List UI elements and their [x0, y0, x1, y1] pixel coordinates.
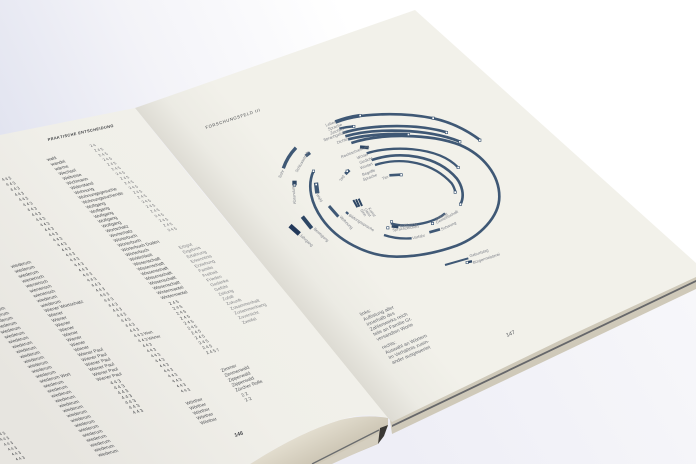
chart labels: Sprachgefühl — [323, 130, 347, 142]
list column: numbers, top: 2 4 5 — [153, 212, 166, 218]
chart labels: Bürgermeisterei — [472, 251, 500, 265]
short bars cluster — [353, 199, 362, 207]
list column: Zimmer entries: Zimmer — [220, 363, 239, 374]
chart labels: Tier — [381, 174, 390, 181]
list column: numbers, lower centre: 2 4 5 — [197, 339, 210, 345]
list column: names, lower left: wiederum — [36, 294, 59, 304]
list column: numbers, far left: 4 4 3 — [30, 211, 43, 217]
list column: numbers, bottom corner: 4 4 3 — [10, 450, 23, 456]
right page heading: FORSCHUNGSFELD III — [205, 107, 261, 130]
list column: numbers, far left: 4 4 3 — [149, 352, 162, 358]
list column: names, lower left: 4 4 3 — [113, 384, 127, 391]
list column: names, bottom left: wiederum — [77, 424, 101, 434]
left page heading: PRAKTISCHE ENTSCHEIDUNG — [47, 123, 114, 142]
list column: numbers, far left: 4 4 3 — [120, 317, 132, 323]
list column: names, upper right: Familie — [197, 265, 215, 273]
list column: names, centre: Weltreise — [61, 172, 83, 181]
list column: names, bottom left: wiederum — [93, 444, 116, 453]
list column: names, lower left: 4 4 3 — [131, 408, 145, 416]
chart labels: Wörter — [356, 151, 370, 160]
list column: Wörther entries: Wörther — [185, 397, 205, 407]
list column: names, bottom left: wiederum — [11, 340, 34, 350]
list column: numbers, far left: 4 4 3 — [17, 196, 30, 202]
list column: names, upper right: Freiheit — [201, 270, 220, 278]
chart labels: Erklärung — [399, 221, 417, 228]
list column: numbers, top: 2 4 5 — [162, 222, 174, 227]
list column: names, bottom left: wiederum — [22, 355, 46, 365]
list column: names, bottom left: wiederum — [19, 350, 42, 360]
list column: numbers, top: 2 4 5 — [144, 203, 157, 209]
list column: names, lower left: wiederum — [13, 265, 37, 275]
list column: names, centre: Wolfgang — [100, 220, 123, 229]
list column: names, centre: Wintermantel — [155, 285, 185, 295]
inner arcs upper right — [367, 149, 463, 204]
list column: numbers, top: 2 4 5 — [110, 165, 123, 171]
chart labels: Sprachzeichen — [392, 224, 419, 232]
chart labels: Schwung — [440, 220, 457, 232]
list column: numbers, far left: 4 4 3 — [51, 236, 64, 242]
chart labels: Bewegung — [313, 226, 330, 243]
list column: names, upper right: Ergebnis — [181, 245, 202, 254]
list column: numbers, far left: 4 4 3 — [175, 382, 188, 388]
list column: numbers, far left: 4 4 3 — [124, 322, 137, 328]
page number 146: 146 — [234, 430, 244, 439]
list column: names, lower left: Wiener Paul — [88, 362, 116, 373]
list column: names, centre: Wortschatz — [108, 229, 134, 238]
list column: numbers, top: 2 4 5 — [166, 226, 179, 232]
list column: names, lower left: Wiener Wortschatz — [43, 299, 86, 314]
list column: Wörther entries: Wörther — [195, 412, 216, 421]
chart labels: Kunst — [367, 206, 378, 218]
list column: numbers, far left: 4 4 3 — [107, 302, 120, 308]
right page caption: teile an Familie Gr. — [372, 316, 414, 338]
right page caption: rechts: — [381, 340, 398, 351]
list column: names, lower left: 4 4 3 — [120, 393, 134, 401]
list column: numbers, lower centre: 2 4 5 — [175, 309, 188, 316]
list column: numbers, far left: 4 4 3 — [13, 191, 26, 197]
list column: names, lower left: wienerisch — [21, 274, 46, 284]
chart labels: Geist — [363, 207, 373, 218]
list column: names, lower left: Wiener — [65, 335, 84, 343]
list column: Zimmer entries: Zürcher Rolle — [234, 379, 265, 393]
list column: numbers, far left: 4 4 3 — [43, 226, 56, 232]
list column: names, bottom left: wiederum — [42, 380, 66, 389]
list column: numbers, far left: 4 4 3 — [115, 312, 128, 318]
list column: Wörther entries: Wörther — [192, 407, 212, 416]
list column: numbers, far left: 4 4 3 — [90, 281, 103, 288]
list column: names, centre: Wissenschaft — [148, 275, 178, 286]
list column: names, lower left: Wiener Paul — [84, 357, 112, 368]
list column: numbers, far left: 4 4 3 — [47, 231, 60, 237]
list column: numbers, far left: 4 4 3 — [158, 362, 171, 368]
right page caption: Auswahl an Wörtern — [384, 333, 429, 356]
list column: numbers, far left: 4 4 3 — [179, 387, 192, 393]
list column: names, lower left: wiederum — [10, 260, 33, 270]
right page caption: im Verhältnis zuein- — [387, 339, 431, 361]
list column: numbers, top: 2 4 5 — [93, 147, 105, 152]
list column: numbers, far left: 4 4 3 — [145, 347, 158, 353]
page number 147: 147 — [505, 330, 516, 339]
list column: names, centre: Wirklichkeit — [128, 252, 154, 262]
list column: names, lower left: 4 4 3 — [109, 379, 123, 386]
list column: names, centre: Wechsel — [57, 168, 77, 176]
list column: names, upper right: Frieden — [205, 274, 224, 283]
list column: numbers, far left: 4 4 3 — [9, 186, 22, 192]
list column: names, centre: Wolfgang — [93, 210, 115, 219]
list column: names, centre: wandel — [49, 159, 67, 167]
list column: numbers, far left: 4 4 3 — [68, 256, 81, 262]
list column: numbers, far left: 4 4 3 — [39, 221, 51, 227]
list column: numbers, far left: 4 4 3 — [22, 201, 34, 207]
list column: names, lower left: Wiener — [58, 325, 76, 334]
list column: numbers, far left: 4 4 3 — [34, 216, 47, 222]
list column: names, lower left: Wiener — [69, 340, 88, 348]
list column: names, lower left: Wiener Paul — [80, 352, 109, 363]
list column: numbers, far left: 4 4 3 — [171, 377, 183, 383]
list column: numbers, lower centre: 2 4 5 — [194, 334, 206, 340]
list column: names, bottom left: wiederum — [89, 439, 112, 448]
list column: numbers, top: 2 4 5 — [118, 175, 131, 181]
list column: numbers, top: 2 4 5 — [136, 194, 149, 199]
chart labels: Tag — [338, 174, 345, 182]
list column: numbers, lower centre: 2 4 5 — [201, 343, 214, 350]
chart labels: Dichter — [336, 136, 350, 145]
chart labels: Rechtschreibung — [340, 143, 370, 159]
list column: names, upper right: Zeitung — [217, 288, 235, 297]
list column: numbers, bottom corner: 4 4 3 — [2, 440, 15, 447]
list column: names, lower left: 4 4 3 — [128, 403, 142, 411]
chart labels: Gedicht — [359, 155, 374, 165]
list column: Zimmer entries: 2 2 — [244, 396, 254, 403]
list column: names, upper right: Zukunft — [225, 298, 243, 306]
list column: numbers, top: 2 4 — [88, 143, 98, 148]
list column: numbers, far left: 4 4 3 — [26, 206, 39, 212]
left page — [0, 108, 388, 464]
chart labels: Wortart — [359, 161, 374, 170]
list column: numbers, far left: 4 4 3 — [85, 276, 98, 283]
list column: names, bottom left: wiederum — [97, 448, 120, 458]
list column: names, centre: Wissenschaft — [144, 271, 174, 281]
list column: names, centre: Wolfgang — [85, 201, 107, 209]
list column: numbers, top: 2 4 5 — [101, 156, 114, 162]
list column: Wörther entries: Wörther — [199, 417, 219, 426]
list column: names, centre: Wörterbuch Duden — [120, 239, 161, 252]
list column: numbers, far left: 4 4 3 — [162, 367, 175, 373]
list column: numbers, top: 2 4 5 — [149, 208, 161, 213]
chart labels: Gemeinschaft — [435, 209, 460, 225]
chart labels: Leben — [325, 119, 337, 128]
list column: names, upper right: Gedanke — [209, 278, 230, 287]
list column: names, centre: Wichmann — [65, 177, 90, 186]
list column: numbers, far left: 4 4 3 — [103, 297, 115, 303]
list column: numbers, far left: 4 4 3 — [64, 251, 77, 257]
list column: names, upper right: Zusammenhang — [233, 302, 268, 315]
book cover and page block, right side — [390, 276, 696, 434]
list column: numbers, lower centre: 2 4 5 — [190, 329, 203, 335]
list column: numbers, top: 2 4 5 — [131, 189, 144, 195]
list column: Zimmer entries: Zipperwald — [227, 371, 252, 383]
list column: numbers, top: 2 4 5 — [105, 161, 118, 166]
right page caption: ander ausgewertet — [391, 344, 433, 366]
list column: numbers, far left: 4 4 3 Wort — [132, 330, 155, 338]
list column: names, lower left: wiederum — [39, 299, 63, 309]
list column: names, upper right: Zusammenhalt — [229, 298, 262, 311]
list column: names, bottom left: wiederum — [69, 414, 93, 424]
list column: Zimmer entries: Zimmerwald — [223, 365, 251, 379]
list column: names, centre: Wohnungsgesuche — [77, 187, 118, 200]
list column: names, centre: Widerstand — [69, 181, 95, 190]
list column: names, bottom left: wiederum Wort — [38, 372, 73, 384]
list column: names, centre: Wortschatz — [104, 224, 130, 233]
list column: numbers, lower centre: 2 4 5 — [168, 299, 180, 306]
right page caption: Auflistung aller — [362, 305, 396, 323]
list column: numbers, far left: 4 4 3 — [5, 181, 17, 187]
list column: names, lower left: Wiener — [47, 310, 65, 319]
list column: names, bottom left: wiederum — [34, 370, 58, 380]
list column: names, lower left: 4 4 3 — [116, 388, 131, 396]
list column: numbers, far left: 4 4 3 — [0, 176, 13, 182]
right page caption: innerhalb des — [365, 311, 397, 328]
list column: numbers, lower centre: 2 4 5 — [171, 304, 184, 311]
chart labels: Wahl — [315, 193, 324, 203]
chart labels: Bildungssprache — [348, 213, 376, 233]
big ring — [310, 136, 499, 257]
list column: names, bottom left: wiederum — [15, 345, 38, 355]
list column: names, upper right: Zweifel — [241, 317, 258, 325]
list column: numbers, top: 2 4 5 — [140, 198, 153, 204]
right page caption: links: — [359, 308, 373, 318]
list column: Wörther entries: Wörther — [188, 402, 208, 412]
list column: names, upper right: Erbgut — [177, 242, 194, 250]
list column: numbers, far left: 4 4 3 — [60, 246, 73, 252]
list column: numbers, far left: 4 4 3 — [111, 307, 124, 313]
list column: numbers, far left: 4 4 3 — [154, 357, 166, 363]
inner arcs lower — [384, 213, 472, 265]
list column: names, centre: Wissenschaft — [136, 261, 166, 272]
list column: names, centre: Wohnung — [73, 187, 95, 195]
chart labels: Geburtstag — [469, 247, 489, 258]
list column: names, centre: Wohnungssuchende — [81, 191, 125, 205]
list column: numbers, far left: 4 4 3 — [166, 372, 179, 378]
list column: names, bottom left: wiederum — [3, 330, 27, 340]
chart: concentric arc diagram — [277, 114, 500, 265]
list column: names, centre: Wörterbuch — [116, 238, 143, 248]
isolated arcs on the left — [283, 147, 400, 234]
list column: numbers, bottom corner: 4 4 3 — [14, 455, 27, 461]
list column: names, centre: Wissenschaft — [140, 266, 170, 276]
list column: numbers, top: 2 4 5 — [157, 217, 170, 223]
list column: names, centre: Wintermantel — [159, 290, 189, 300]
list column: names, bottom left: wiederum — [7, 335, 30, 345]
list column: numbers, far left: 4 4 3 — [77, 266, 90, 273]
list column: numbers, far left: 4 4 3 — [141, 342, 154, 348]
list column: numbers, lower centre: 2 4 5 — [179, 314, 192, 321]
list column: numbers, far left: 4 4 3 Wörter — [137, 334, 162, 343]
chart labels: Sprache — [362, 172, 378, 182]
book cover and page block, left side — [250, 416, 388, 464]
list column: Zimmer entries: Zipperwald — [230, 376, 256, 388]
list column: names, lower left: 4 4 3 — [124, 398, 138, 406]
chart labels: Begriffe — [361, 167, 377, 177]
list column: names, lower left: Wiener — [50, 315, 69, 324]
list column: names, bottom left: wiederum — [61, 404, 85, 414]
end markers — [293, 114, 481, 264]
list column: Zimmer entries: 2 2 — [240, 391, 250, 398]
chart labels: Wohnung — [339, 215, 354, 230]
list column: names, centre: Wörterbuch — [124, 248, 151, 257]
chart labels — [277, 119, 500, 265]
list column: numbers, top: 2 4 5 — [127, 184, 140, 190]
chart labels: Jahrgang — [299, 233, 314, 248]
list column: numbers, top: 2 4 5 — [97, 151, 110, 157]
list column: names, bottom left: wiederum — [81, 429, 105, 439]
chart labels: Zeichen — [329, 126, 344, 136]
list column: names, bottom left: wiederum — [58, 399, 81, 409]
chart labels: Sinn — [359, 208, 368, 217]
list column: names, centre: wahl — [45, 156, 58, 162]
list column: numbers, bottom corner: 4 4 3 — [6, 445, 19, 452]
list column: names, lower left: wiederum — [17, 270, 40, 279]
list column: names, upper right: Zufall — [221, 294, 235, 301]
list column: names, lower left: wienerisch — [32, 289, 57, 299]
list column: names, lower left: wienerisch — [28, 284, 54, 294]
list column: numbers, top: 2 4 5 — [123, 179, 136, 185]
list column: numbers, far left: 4 4 3 — [128, 327, 141, 333]
list column: names, centre: Wolfgang — [96, 215, 119, 224]
list column: names, bottom left: wiederum — [26, 360, 50, 370]
list column: numbers, far left: 4 4 3 — [73, 261, 85, 267]
outer arcs, top band — [335, 114, 480, 142]
list column: names, bottom left: wiederum — [46, 384, 69, 394]
list column: names, centre: Wissenschaft — [152, 280, 182, 291]
list column: names, centre: wärme — [53, 164, 70, 171]
list column: numbers, top: 2 4 5 — [114, 170, 127, 176]
list column: names, lower left: Wiener — [62, 330, 80, 339]
chart labels: Abrundung — [290, 184, 297, 204]
list column: numbers, lower centre: 2 4 5 — [182, 319, 195, 325]
chart labels: Vorfahr — [412, 233, 426, 240]
list column: numbers, far left: 4 4 3 — [94, 286, 107, 293]
list column: names, upper right: Gefühl — [213, 284, 229, 292]
right page caption: versandten Worte — [375, 322, 415, 343]
list column: names, lower left: Wiener Paul — [76, 347, 105, 358]
list column: names, centre: Wörterbuch — [112, 233, 139, 243]
list column: names, bottom left: wiederum — [54, 394, 77, 404]
right page — [135, 10, 696, 422]
list column: names, bottom left: wiederum — [30, 365, 54, 375]
right page caption: Zahlenwerks reich — [369, 312, 409, 333]
list column: names, lower left: Wiener Paul — [95, 372, 124, 383]
list column: names, lower left: Wiener — [54, 320, 73, 329]
list column: numbers, far left: 4 4 3 — [98, 292, 111, 298]
chart labels: Sprache — [327, 122, 343, 132]
list column: names, bottom left: wiederum — [0, 325, 23, 335]
list column: names, bottom left: wiederum — [73, 419, 97, 429]
list column: names, upper right: Erkenntnis — [189, 254, 214, 264]
list column: numbers, lower centre: 2 4 5 7 — [205, 347, 221, 355]
list column: numbers, far left: 4 4 3 — [81, 271, 94, 278]
list column: names, lower left: Wiener Paul — [91, 367, 120, 378]
list column: names, bottom left: wiederum — [65, 409, 89, 419]
chart labels: Schlussstrich — [294, 150, 310, 173]
list column: names, centre: Wissenschaft — [132, 256, 162, 267]
list column: names, lower left: wienerisch — [24, 279, 50, 289]
list column: names, upper right: Erfahrung — [185, 250, 208, 259]
list column: names, upper right: Zuversicht — [237, 310, 261, 320]
list column: names, bottom left: wiederum — [85, 434, 108, 444]
list column: names, centre: Wolfgang — [89, 206, 111, 214]
chart labels: Sehr — [277, 168, 285, 179]
list column: names, bottom left: wiederum — [50, 389, 73, 399]
list column: numbers, far left: 4 4 3 — [56, 241, 68, 247]
chart labels: Zeitung — [434, 211, 448, 222]
list column: names, lower left: Wiener — [73, 345, 91, 353]
list column: names, upper right: Erziehung — [193, 259, 217, 268]
list column: numbers, lower centre: 2 4 5 — [186, 324, 199, 330]
